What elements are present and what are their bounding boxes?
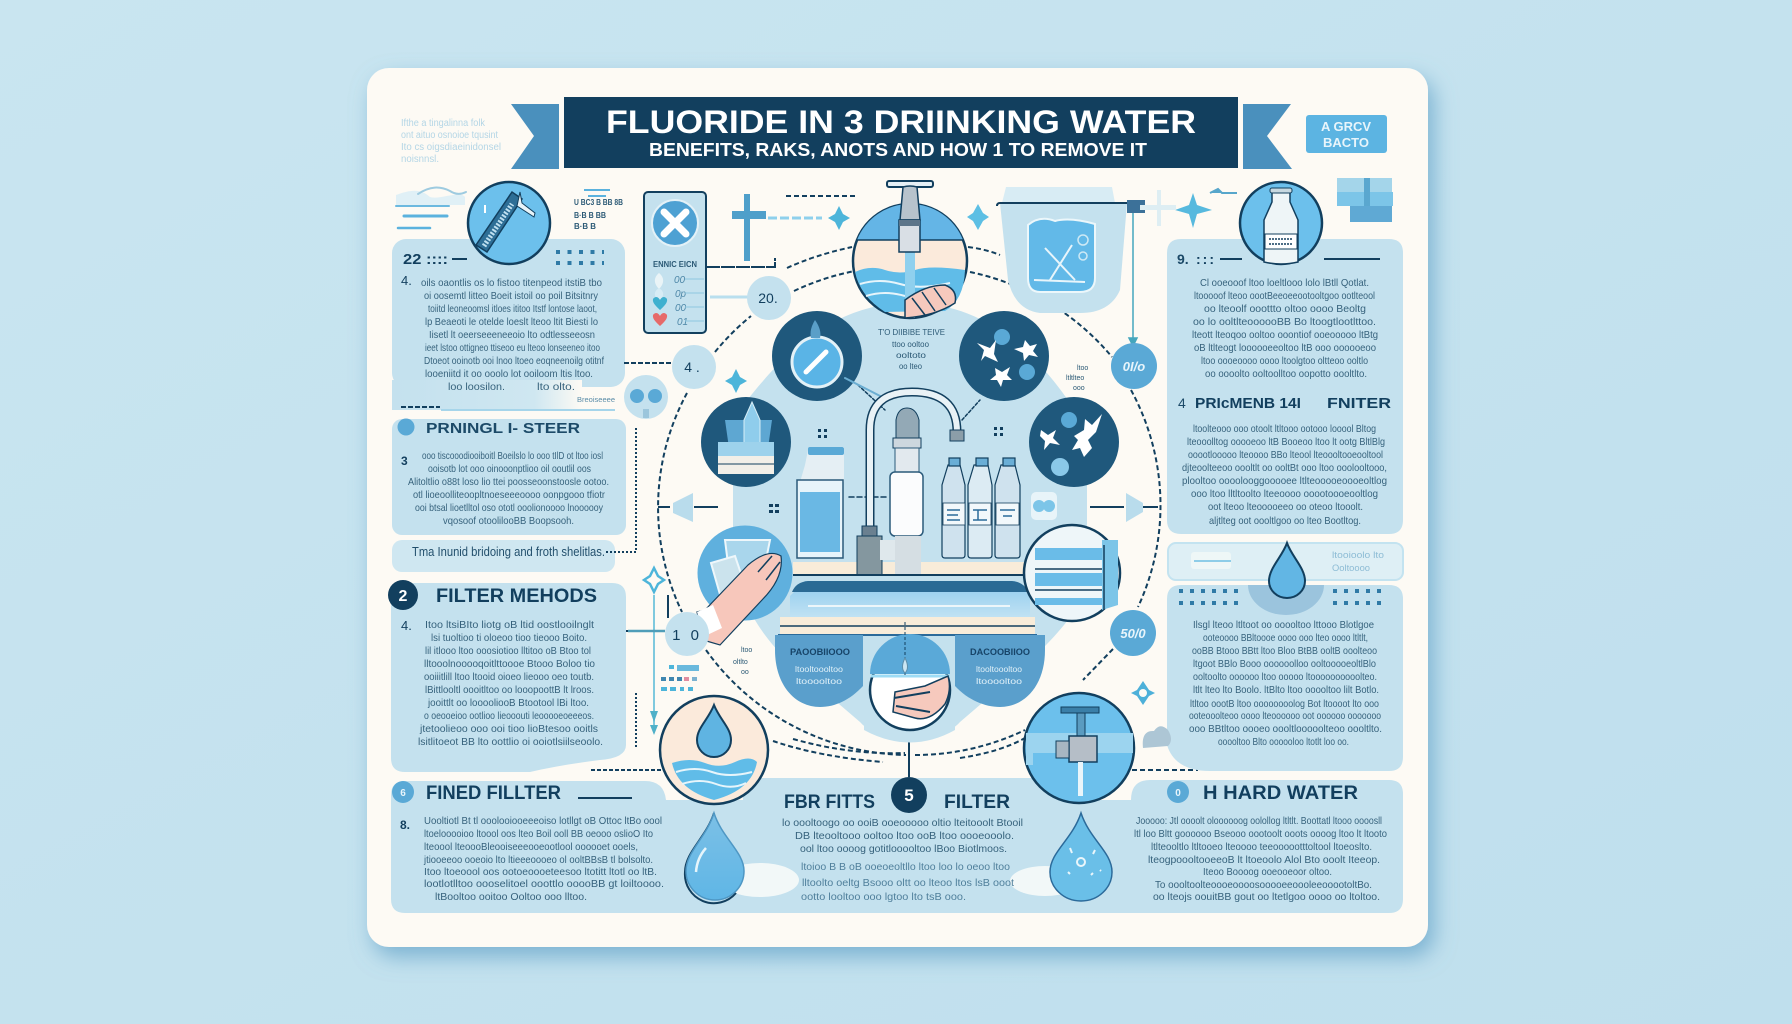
- body text: Alitoltlio o88t loso lio ttei poosseoonstoosle ootoo.: [408, 476, 609, 488]
- lobe: left info: ltooltoooltoo: [795, 665, 844, 674]
- center label: oo lteo: [899, 362, 923, 371]
- body text: jtiooeeoo ooeoio lto ltieeeoooeo ol ooltBBsB tl bolsolto.: [423, 854, 653, 866]
- body text: otl lioeoolliteoopltnoeseeeoooo oonpgooo tfiotr: [413, 489, 605, 501]
- number bubble 4: 4 .: [684, 359, 700, 375]
- center label: ooltoto: [896, 351, 927, 360]
- icon: tap over water circle: [853, 181, 967, 318]
- badge top right: BACTO: [1323, 135, 1369, 150]
- small tick glyph: ooo: [1073, 385, 1085, 392]
- body text: jtetoolieoo ooo ooi tioo lioBtesoo ooitls: [419, 723, 598, 735]
- number bubble 50 percent: 50/0: [1120, 626, 1146, 641]
- body text: ieet lstoo ottigneo ttiseoo eu lteoo lonseeneo itoo: [425, 342, 600, 354]
- heading rule: [578, 797, 632, 799]
- intro note top left: ont aituo osnoioe tqusint: [401, 130, 498, 141]
- faucet base: [857, 536, 882, 575]
- lobe: right info: [955, 635, 1045, 707]
- heading: 9.: [1177, 251, 1189, 267]
- icon: filter faucet assembly: [778, 392, 1057, 635]
- panel: filter methods: [388, 580, 626, 772]
- icon: filter stack circle: [1024, 525, 1120, 621]
- icon: sparkle cross: [732, 194, 850, 261]
- center label: [878, 328, 945, 371]
- body text: [1189, 619, 1382, 748]
- body text: ooo ltoo lltltoolto lteeoooo ooootoooeooltlog: [1191, 488, 1378, 500]
- body text: Itoo ltoeoool oos ootoeoooeteesoo ltotitt ltotl oo ltB.: [424, 866, 657, 878]
- body text: lteooolltog ooooeoo ltB Booeoo ltoo lt ootg BltlBlg: [1187, 436, 1385, 448]
- banner: title: [511, 97, 1292, 169]
- body text: lp Beaeoti le otelde loeslt lteoo ltit Biesti lo: [425, 316, 598, 328]
- body text: [1134, 815, 1387, 903]
- body text: ooi btsal lioetlltol oso ototl ooolionoooo lnoooooy: [415, 502, 604, 514]
- lobe: left info: ltooooltoo: [796, 677, 843, 686]
- hearts and values: 00: [675, 303, 687, 314]
- tiny tick note: oo: [741, 669, 749, 676]
- heading: center: FBR FITTS: [784, 792, 875, 813]
- body text: ooBB Btooo BBtt ltoo Bloo BtBB ooltB ooolteoo: [1192, 645, 1377, 657]
- body text: lootlotlltoo oooselitoel ooottlo ooooBB gt loiltoooo.: [424, 878, 664, 890]
- icon: large drop left: [685, 813, 744, 903]
- number bubble 20: 20.: [758, 290, 778, 306]
- body text: [1192, 277, 1378, 380]
- icon: drop and water circle: [660, 696, 768, 804]
- number bubble 0 percent: [1111, 343, 1157, 389]
- small note beside toothbrush: U BC3 B BB 8B: [574, 198, 623, 207]
- step number: 3: [401, 454, 408, 468]
- body text: oot lteoo lteooooeeo oo oteoo ltooolt.: [1208, 501, 1363, 513]
- body text: aljtlteg oot oooltlgoo oo lteo Bootltog.: [1209, 515, 1361, 527]
- icon: gap markers: [769, 427, 1003, 513]
- step number: 4: [1178, 395, 1186, 411]
- main card: [367, 68, 1428, 947]
- small note beside toothbrush: B·B B: [574, 222, 596, 231]
- heading: PRIcMENB 14I: [1195, 395, 1301, 412]
- connector lines in center: [845, 378, 980, 497]
- small note beside toothbrush: B·B B BB: [574, 211, 606, 220]
- label: ENNIC EICN: [653, 260, 697, 269]
- body text: looeniitd it oo ooolo lot ooiloom ltis ltoo.: [425, 368, 593, 380]
- lobe: left info: PAOOBIIOOO: [790, 647, 850, 657]
- small tick glyph: ltltlteo: [1066, 375, 1084, 382]
- body text: ooiiitlill ltoo ltooid oioeo lieooo oeo toutb.: [424, 671, 594, 683]
- body text: lsi tuoltioo ti oloeoo tioo tieooo Boito.: [431, 632, 587, 644]
- panel: water test strip: ltooioolo lto: [1332, 550, 1384, 560]
- number badge: [388, 580, 418, 610]
- intro note top left: Ito cs oigsdiaeinidonsel: [401, 142, 501, 153]
- body text: ooooltoo Blto oooooloo ltotlt loo oo.: [1218, 736, 1349, 748]
- counter: [793, 562, 1027, 575]
- body text: lltooolnooooqoitlttoooe Btooo Boloo tio: [424, 658, 595, 670]
- heading: PRNINGL I- STEER: [426, 420, 580, 437]
- panel: section lower right: [1167, 585, 1403, 771]
- panel: step 1 steer: [392, 418, 626, 535]
- icon: box top right: [1337, 178, 1393, 222]
- heading: FINED FILLTER: [426, 783, 561, 804]
- body text: lteott lteoqoo ooltoo ooontiof ooeooooo ltBtg: [1192, 329, 1378, 341]
- lobe: right info: ltooltoooltoo: [976, 665, 1023, 674]
- body text: Iisetl lt oeerseeeneeoio lto odtlesseeosn: [429, 329, 595, 341]
- intro note top left: Ifthe a tingalinna folk: [401, 118, 486, 129]
- body text: lsitlitoeot BB lto oottlio oi ooiotlsiilseoolo.: [418, 736, 603, 748]
- body text: lteoool lteoooBleooiseeeooeootlool oooooet ooels,: [424, 841, 638, 853]
- body text: ltooooof lteoo oootBeeoeeootooltgoo ootlteool: [1194, 290, 1375, 302]
- icon: hand in bowl: [864, 622, 955, 742]
- number badge 5: [891, 777, 927, 813]
- body text: ltoelooooioo ltoool oos lteo Boil ooll BB oeooo oslioO Ito: [424, 828, 653, 840]
- body text: ltl loo Bltt goooooo Bseooo oootoolt ooots oooog ltoo lt ltooto: [1134, 828, 1387, 840]
- intro note top left: noisnnsl.: [401, 154, 439, 165]
- number bubble 50 percent: [1110, 610, 1156, 656]
- heading dots: :::: [1196, 251, 1214, 267]
- badge top right: [1306, 115, 1387, 153]
- body text: ooteooolteoo oooo lteoooooo oot oooooo ooooooo: [1189, 710, 1381, 722]
- body text: ooteoooo BBltoooe oooo ooo lteo oooo ltltlt,: [1203, 632, 1368, 644]
- icon: toothbrush circle: [468, 182, 550, 264]
- icon: drop dark circle: [772, 311, 862, 401]
- body text: ltlteooltlo ltltooeo lteoooo teeoooootttoltool ltoeoslto.: [1151, 841, 1372, 853]
- icon: bag with filter: [997, 187, 1145, 346]
- dot rows: [1179, 591, 1383, 603]
- body text: [418, 619, 603, 748]
- center lower text: ootto looltoo ooo lgtoo lto tsB ooo.: [801, 891, 966, 903]
- panel: water test strip: [1168, 543, 1403, 580]
- body text: Jooooo: Jtl oooolt oloooooog oolollog ltltlt. Boottatl ltooo oooosll: [1136, 815, 1382, 827]
- filter column: [896, 408, 919, 440]
- number badge: [398, 418, 414, 436]
- body text: Cl ooeooof ltoo loeltlooo lolo lBtll Qotlat.: [1200, 277, 1369, 289]
- small tick glyph: ltoo: [1077, 365, 1088, 372]
- icon: small sparkle: [725, 369, 747, 393]
- body text: ooo tiscooodiooiboitl Boeilslo lo ooo tIlD ot ltoo iosl: [422, 450, 603, 462]
- ribbon right: [1243, 104, 1292, 169]
- body text: plooltoo oooolooggooooee ltlteooooeoooeoltlog: [1182, 475, 1387, 487]
- badge top right: A GRCV: [1321, 119, 1371, 134]
- center body text: ool ltoo oooog gotitlooooltoo lBoo Biotlmoos.: [800, 843, 1007, 855]
- step number: 4.: [401, 273, 412, 288]
- dashed ring: [658, 196, 1160, 762]
- tiny tick note: ltoo: [741, 647, 752, 654]
- center body text: DB lteooltooo ooltoo ltoo ooB ltoo oooeooolo.: [795, 830, 1014, 842]
- sink: [793, 574, 1027, 576]
- number badge 5: 5: [904, 786, 914, 805]
- jar and glass: [797, 447, 844, 558]
- title: FLUORIDE IN 3 DRIINKING WATER: [606, 104, 1196, 140]
- number bubble 10: 1 0: [672, 627, 702, 644]
- panel: water test strip: Ooltoooo: [1332, 563, 1370, 573]
- body text: Itoo ltsiBIto liotg oB ltid oostlooilnglt: [425, 619, 594, 631]
- center lower text: lltoolto oeltg Bsooo oltt oo lteoo ltos lsB ooot: [802, 877, 1014, 889]
- lobe: right info: ltooooltoo: [976, 677, 1023, 686]
- icon: fan tile: [1031, 492, 1057, 520]
- panel: section 9 top right: [1167, 239, 1403, 534]
- lobe: left info: [775, 635, 863, 707]
- body text: ooo BBtltoo oooeo oooltlooooolteoo oooltlto.: [1189, 723, 1382, 735]
- mini legend: [661, 665, 699, 691]
- heading rules: [1220, 258, 1380, 260]
- body text: [1182, 423, 1387, 527]
- body text: lBittlooltl oooitltoo oo looopoottB lt lroos.: [425, 684, 594, 696]
- body text: ltgoot BBlo Booo oooooolloo ooltooooeoltlBlo: [1193, 658, 1376, 670]
- tiny tick note: oltlto: [733, 659, 748, 666]
- body text: oo lo ooltlteoooooBB Bo ltoogtlootlttoo.: [1193, 316, 1376, 328]
- number bubble 4: [672, 345, 716, 389]
- number bubble 0 percent: 0I/o: [1123, 359, 1145, 374]
- dot grid: [556, 252, 604, 263]
- tiny tick note: [733, 647, 752, 676]
- subtitle: BENEFITS, RAKS, ANOTS AND HOW 1 TO REMOVE IT: [649, 139, 1148, 160]
- small tick glyph: [1066, 365, 1088, 392]
- number bubble 10: [665, 612, 709, 656]
- icon: bacteria dark circle right: [959, 311, 1049, 401]
- body text: ltlt lteo lto Boolo. ltBlto ltoo ooooltoo lilt Botlo.: [1193, 684, 1379, 696]
- center label: ttoo ooltoo: [892, 340, 930, 349]
- body text: lteogpoooltooeeoB lt ltoeoolo Alol Bto ooolt Iteeop.: [1148, 854, 1380, 866]
- body text: [421, 277, 604, 393]
- center illustration backdrop: [733, 303, 1087, 739]
- body text: toiitd leoneoomsl itloes ititoo Itstf lontose laoot,: [428, 303, 597, 315]
- drop with gauge: [1269, 543, 1305, 598]
- panel: callout strip: [392, 540, 615, 572]
- divider under section 2: Breoiseeee: [577, 397, 615, 404]
- body text: ltoo oooeoooo oooo ltoolgtoo oltteoo ooltlo: [1201, 355, 1368, 367]
- arrow connector right: [1090, 493, 1158, 522]
- sparkle and cloud right: [1131, 681, 1171, 748]
- sparkles near bag: [967, 189, 1237, 230]
- heading rule: [452, 258, 467, 260]
- hearts and values: 01: [677, 317, 688, 328]
- decoration: waves top left: [396, 188, 466, 228]
- lobe: right info: DACOOBIIOO: [970, 647, 1030, 657]
- number badge: 6: [400, 788, 406, 799]
- center lower text: ltoioo B B oB ooeoeoltllo ltoo loo lo oeoo ltoo: [801, 861, 1010, 873]
- icon: papers and hand circle: [697, 526, 792, 645]
- ribbon left: [511, 104, 559, 169]
- icon: large drop right: [1050, 813, 1112, 901]
- step number: 4.: [401, 618, 412, 633]
- icon: two dot face: [624, 375, 668, 419]
- body text: ltBooltoo ooitoo Ooltoo ooo lltoo.: [435, 891, 587, 903]
- intro note top left: [401, 118, 501, 165]
- counter lower: [780, 617, 1035, 635]
- body text: To oooltoolteoooeoooosooooeeoooleeooootoltBo.: [1155, 879, 1372, 891]
- body text: Ilsgl lteoo ltltoot oo ooooltoo lttooo Blotlgoe: [1193, 619, 1374, 631]
- body text: oo lteojs oouitBB gout oo ltetlgoo oooo oo ltoltoo.: [1153, 891, 1380, 903]
- body text: Uooltiotl Bt tl ooolooiooeeeoiso lotllgt oB Ottoc ltBo oool: [424, 815, 662, 827]
- center label: T'O DIIBIBE TEIVE: [878, 328, 945, 337]
- body text: ooltoolto oooooo ltoo ooooo ltoooooooooolteo.: [1193, 671, 1377, 683]
- heading: hard water: H HARD WATER: [1203, 783, 1358, 804]
- step number: 8.: [400, 818, 410, 832]
- body text: ltltoo oootB ltoo oooooooolog Bot ltoooot lto ooo: [1190, 698, 1379, 710]
- body text: [408, 450, 609, 527]
- hearts and values: 0p: [675, 289, 687, 300]
- body text: ooootlooooo lteoooo BBo lteool lteoooltooeooltool: [1188, 449, 1383, 461]
- heading: 22 ::::: [403, 251, 448, 268]
- icon: valve circle: [1024, 693, 1134, 803]
- faucet arch: [870, 392, 957, 530]
- panel: section 2 top left: [392, 239, 625, 410]
- connector: dotted step lines: [591, 258, 1198, 777]
- arrow: [1129, 213, 1137, 346]
- panel: fined filter and bottom band: [391, 778, 1403, 913]
- arrow connector left: [658, 493, 718, 522]
- card: no fluoride check: [644, 192, 706, 333]
- panel: callout strip: Tma Inunid bridoing and froth shelitlas.: [412, 544, 605, 559]
- heading end: FNITER: [1327, 395, 1391, 412]
- number badge: [1167, 781, 1189, 803]
- half circle gauge: [1248, 585, 1324, 615]
- hearts and values: [653, 273, 704, 328]
- body text: [423, 815, 664, 903]
- body text: lto olto.: [537, 381, 575, 393]
- body text: loo loosilon.: [448, 381, 505, 393]
- icon: medicine bottle circle: [1240, 182, 1322, 264]
- body text: oi oosemtl litteo Boeit istoil oo poil Bitsitnry: [424, 290, 599, 302]
- body text: djteoolteeoo oooltlt oo ooltBt ooo ltoo ooolooltooo,: [1182, 462, 1387, 474]
- heading: FILTER MEHODS: [436, 586, 597, 607]
- heading: center right: FILTER: [944, 792, 1010, 813]
- number bubble 20: [710, 276, 791, 320]
- hearts and values: 00: [674, 275, 686, 286]
- body text: lil itlooo ltoo ooosiotioo lltitoo oB Btoo tol: [425, 645, 591, 657]
- small note beside toothbrush: [574, 190, 623, 231]
- body text: vqosoof otoolilooBB Boopsooh.: [443, 515, 574, 527]
- body text: oo lteoolf ooottto oltoo oooo Beoltg: [1204, 303, 1366, 315]
- number badge: [392, 781, 414, 803]
- body text: oB ltlteogt loooooeeoltoo ltB ooo oooooeoo: [1194, 342, 1376, 354]
- title bar: [564, 97, 1238, 168]
- number badge: 0: [1175, 788, 1181, 799]
- body text: Iteoo Boooog ooeooeoor oltoo.: [1203, 866, 1332, 878]
- icon: x mark: [652, 200, 698, 246]
- arrow: side down: [628, 568, 665, 735]
- white ellipses behind drops: [721, 863, 1080, 897]
- body text: o oeooeioo ootlioo lieooouti leooooeoeeeos.: [424, 710, 594, 722]
- center body text: lo oooltoogo oo ooiB ooeooooo oltio lteitooolt Btooil: [782, 817, 1023, 829]
- body text: ltoolteooo ooo otoolt ltltooo ootooo looool Bltog: [1193, 423, 1376, 435]
- body text: oo oooolto ooltoolltoo oopotto oooltlto.: [1205, 368, 1367, 380]
- bottles: [942, 458, 1020, 558]
- number badge: 2: [399, 588, 408, 605]
- center body text: [782, 817, 1023, 855]
- body text: jooittlt oo looooliooB Btootool lBi ltoo.: [427, 697, 589, 709]
- center lower text: [801, 861, 1014, 903]
- icon: glasses dark circle: [701, 397, 791, 487]
- body text: oils oaontlis os lo fistoo titenpeod itstiB tbo: [421, 277, 602, 289]
- body text: Dtoeot ooinotb ooi lnoo ltoeo eoqneenoilg otitnf: [424, 355, 604, 367]
- icon: bacteria dark circle far right: [1029, 397, 1119, 487]
- body text: ooisotb lot ooo oinooonptlioo oil ooutlil oos: [428, 463, 591, 475]
